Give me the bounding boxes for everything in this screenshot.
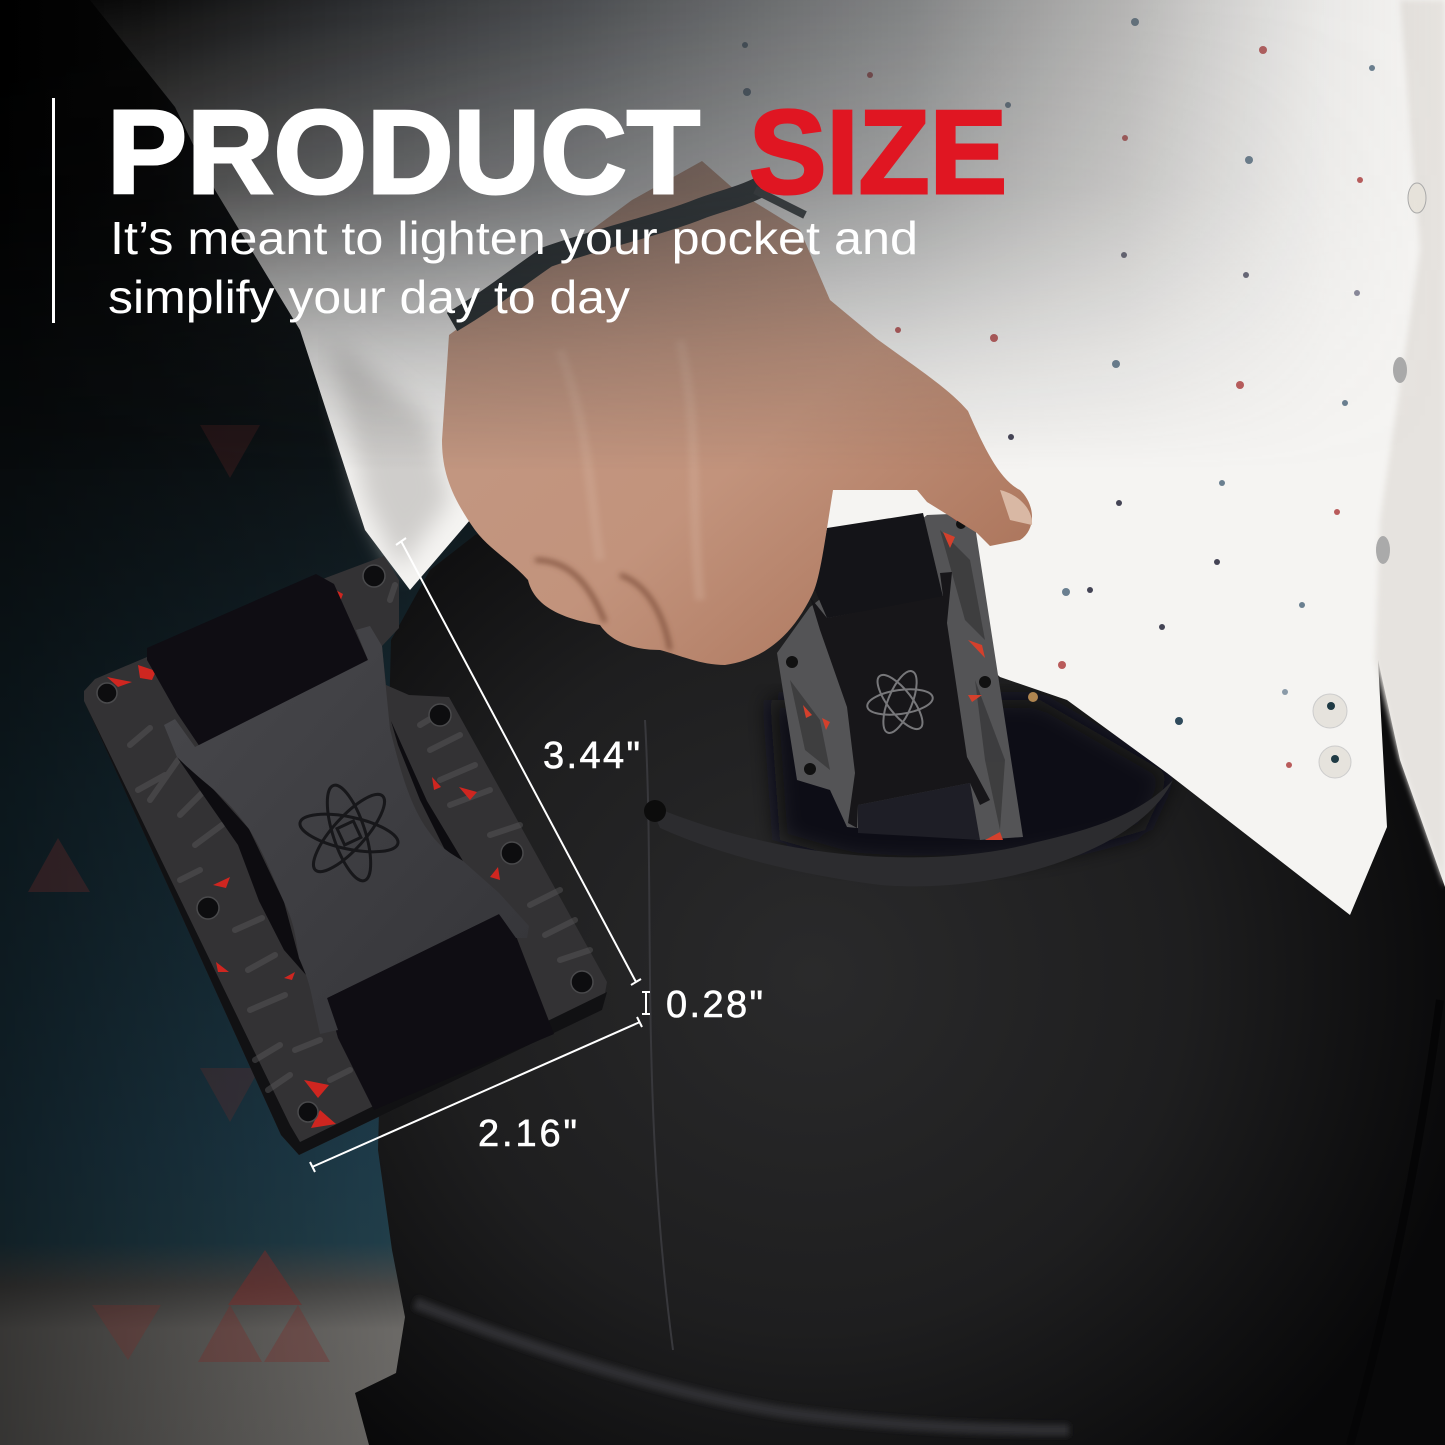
jeans (355, 400, 1445, 1445)
subtitle: It’s meant to lighten your pocket and (110, 212, 918, 264)
elastic band bottom (327, 914, 554, 1110)
elastic band side right (391, 721, 463, 861)
title: PRODUCT (107, 86, 700, 219)
elastic band top (147, 574, 368, 747)
dimension: length: 3.44" (543, 735, 640, 777)
dimension: thickness: 0.28" (666, 984, 763, 1026)
red flecks (107, 588, 500, 1128)
title divider (52, 98, 55, 323)
main wallet (84, 556, 607, 1155)
shirt buttons (1313, 183, 1426, 778)
shirt dots (742, 18, 1375, 768)
dimension: length (396, 538, 641, 985)
title (107, 86, 1007, 219)
subtitle (108, 212, 918, 323)
metal clip (810, 572, 990, 828)
title: SIZE (749, 86, 1007, 219)
carbon plate (84, 556, 607, 1155)
carbon streaks (130, 585, 590, 1090)
subtitle: simplify your day to day (108, 271, 630, 323)
small wallet in pocket (777, 513, 1023, 840)
shirt (90, 0, 1445, 915)
thumb nail (1000, 490, 1032, 525)
bracelet (452, 187, 805, 322)
dimension: width (310, 1017, 642, 1172)
screws (97, 565, 593, 1122)
logo (866, 667, 934, 737)
elastic band side left (177, 757, 306, 975)
hand (442, 161, 1032, 665)
atom logo (297, 781, 401, 885)
elastic bands (815, 513, 943, 618)
dark top overlay (90, 0, 1357, 452)
dimension: width: 2.16" (478, 1113, 577, 1155)
jeans pocket (650, 780, 1173, 886)
metal clip (164, 626, 529, 1034)
carbon plate (777, 513, 1023, 840)
